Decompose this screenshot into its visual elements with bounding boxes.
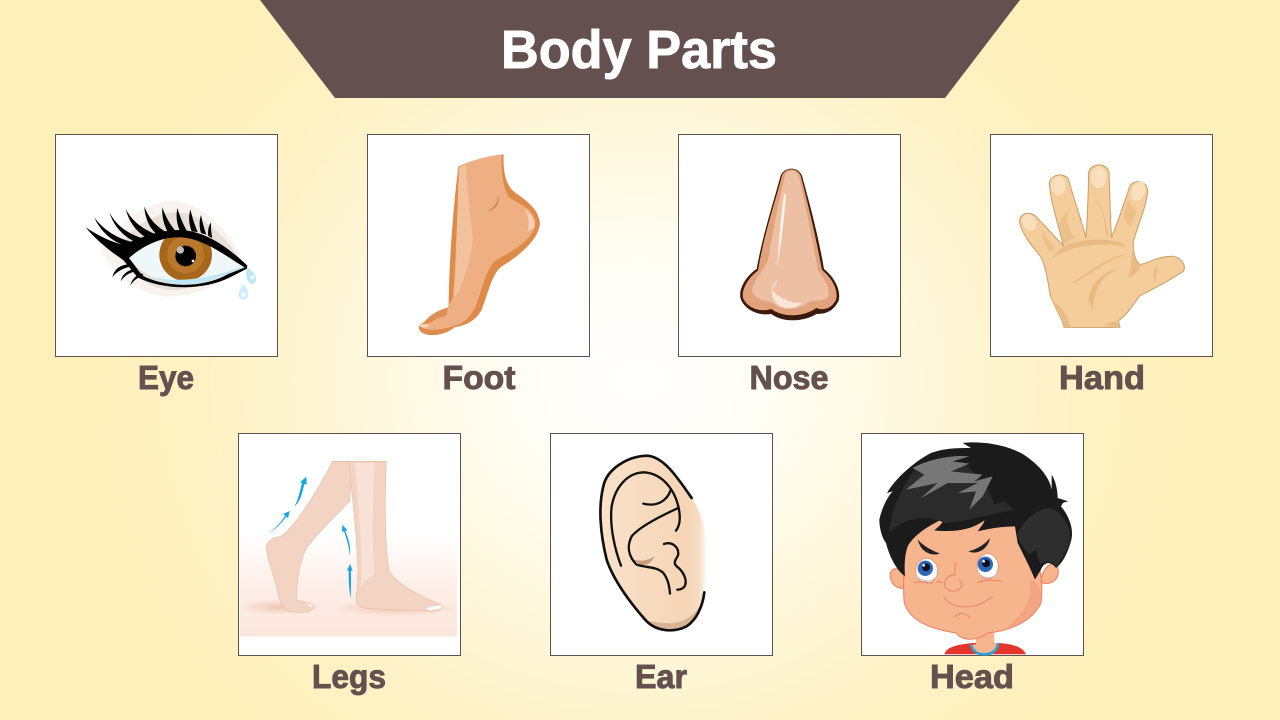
icon: ear [600, 456, 707, 630]
label: Ear: Ear [635, 658, 687, 695]
eyelid [86, 227, 248, 287]
label: Nose: Nose [750, 359, 828, 396]
face [904, 515, 1042, 639]
icon: head [879, 442, 1072, 654]
label: Foot: Foot [442, 359, 516, 396]
panel: eye [56, 134, 278, 396]
label: Legs: Legs [312, 658, 386, 695]
panel: head [862, 434, 1084, 695]
panel: ear [550, 434, 772, 695]
icon: nose [740, 169, 839, 320]
panel: foot [368, 134, 590, 396]
panel: hand [990, 134, 1212, 396]
icon: hand [1019, 165, 1184, 327]
icon: legs [240, 461, 458, 637]
icon: foot [419, 154, 540, 335]
panel: nose [678, 134, 900, 396]
label: Eye: Eye [138, 359, 194, 396]
title banner [260, 0, 1020, 98]
hair [879, 442, 1072, 580]
eyes [916, 554, 998, 583]
panel: legs [238, 434, 460, 695]
brows and mouth [914, 563, 1001, 618]
icon: eye [86, 201, 256, 300]
label: Head: Head [930, 658, 1014, 695]
shirt [944, 643, 1026, 654]
eyelashes [94, 206, 212, 286]
ears [890, 569, 906, 588]
title: Body Parts [501, 20, 777, 80]
label: Hand: Hand [1059, 359, 1145, 396]
